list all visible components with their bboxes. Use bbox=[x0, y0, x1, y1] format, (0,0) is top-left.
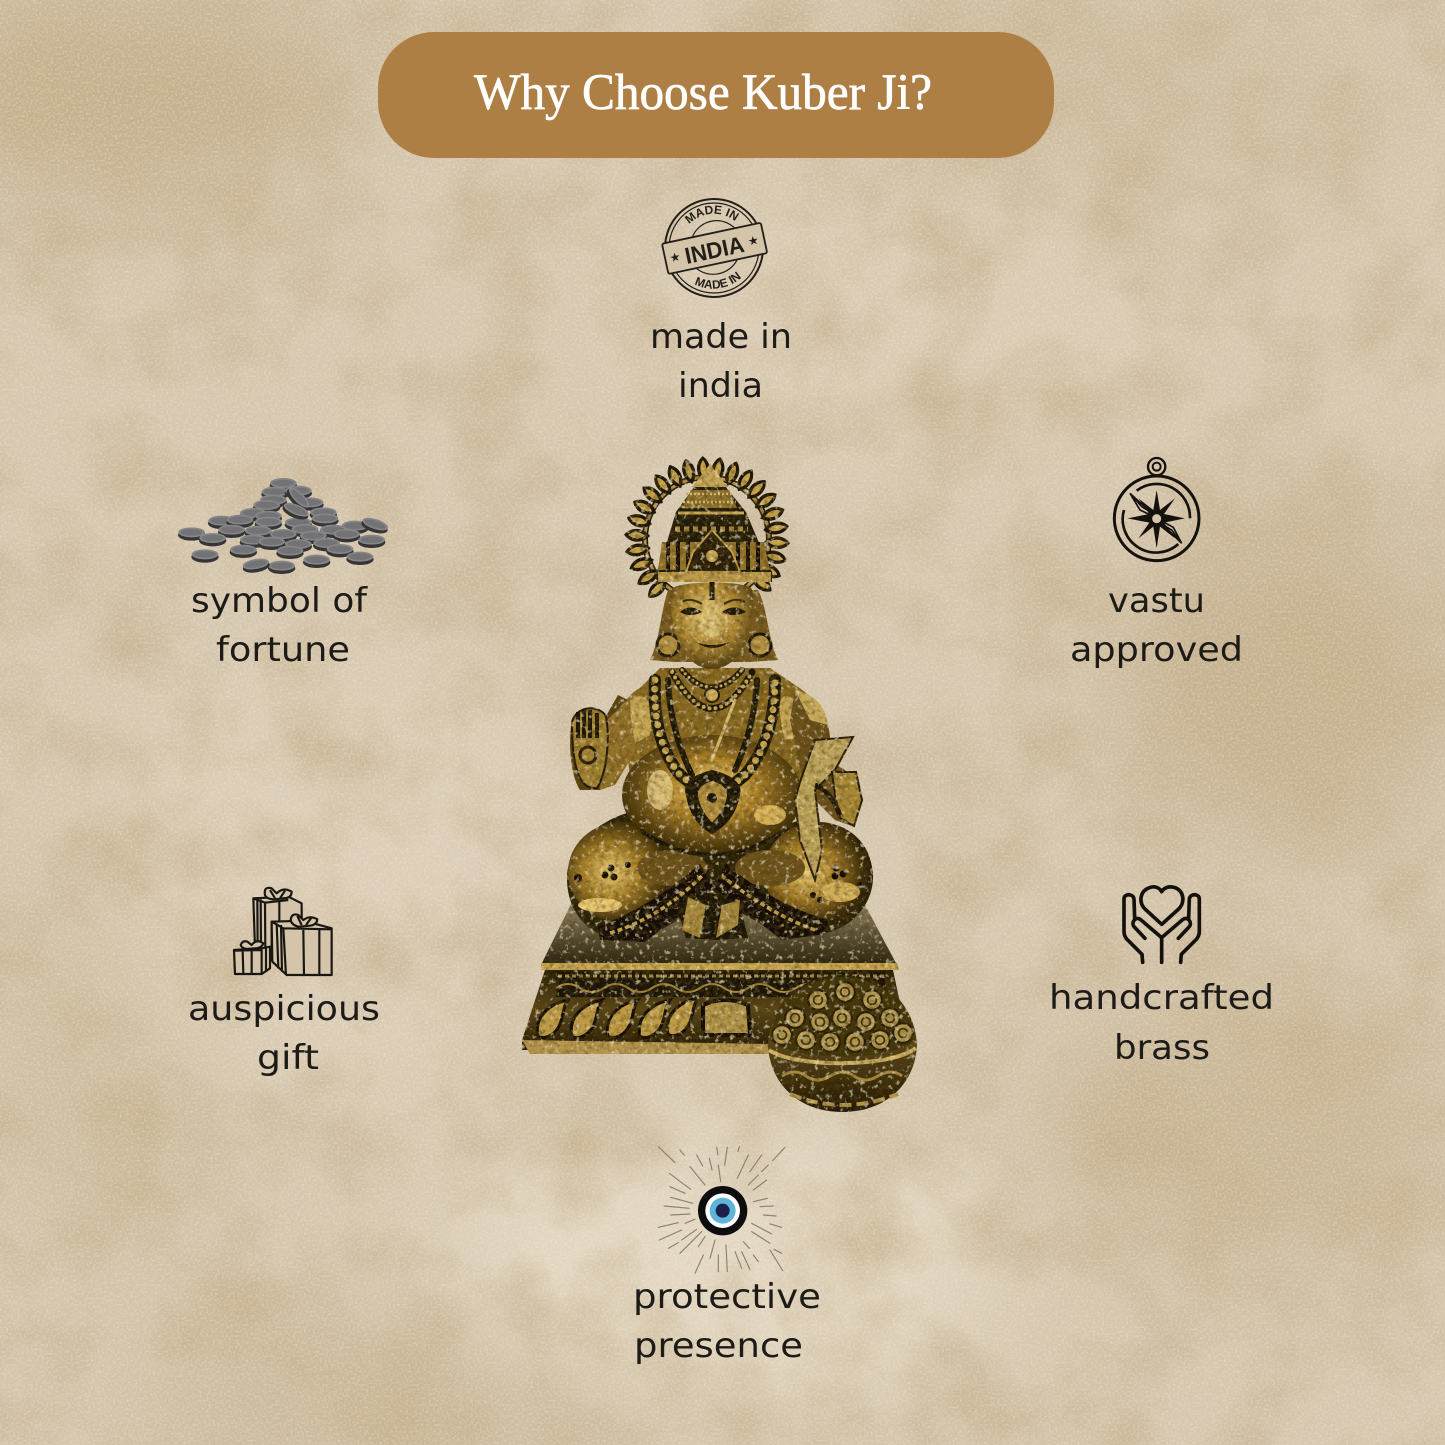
icon: made in india stamp bbox=[661, 198, 768, 298]
icon: made in india stamp: MADE IN bbox=[684, 205, 740, 224]
statue: coin pot bbox=[768, 975, 917, 1112]
label: symbol of fortune: fortune bbox=[216, 630, 350, 670]
statue: crown bbox=[656, 464, 772, 582]
label: auspicious gift: auspicious bbox=[188, 989, 380, 1029]
label: made in india bbox=[650, 317, 792, 406]
icon: made in india stamp: INDIA bbox=[682, 231, 746, 269]
icon: made in india stamp: ★ bbox=[747, 233, 760, 249]
label: vastu approved: approved bbox=[1070, 630, 1243, 670]
label: protective presence bbox=[633, 1277, 821, 1366]
statue: necklaces bbox=[655, 670, 775, 834]
label: handcrafted brass: brass bbox=[1114, 1028, 1210, 1068]
icon: hands holding heart bbox=[1124, 887, 1199, 962]
label: made in india: india bbox=[678, 366, 763, 406]
icon: made in india stamp: MADE IN bbox=[694, 272, 741, 289]
brass Kuber statue bbox=[522, 456, 917, 1112]
statue: halo bbox=[624, 456, 790, 602]
icon: evil eye with rays bbox=[658, 1147, 785, 1273]
feature: protective presence bbox=[633, 1147, 821, 1366]
icon: gift boxes bbox=[234, 888, 332, 975]
label: vastu approved: vastu bbox=[1108, 581, 1205, 621]
label: vastu approved bbox=[1070, 581, 1243, 670]
icon: made in india stamp: ★ bbox=[668, 249, 682, 265]
feature: symbol of fortune bbox=[178, 478, 390, 670]
label: handcrafted brass bbox=[1049, 978, 1274, 1068]
statue: raising hand arm bbox=[570, 695, 636, 790]
label: protective presence: protective bbox=[633, 1277, 821, 1317]
statue: stepped base bbox=[522, 892, 916, 1054]
title banner bbox=[378, 32, 1054, 158]
label: made in india: made in bbox=[650, 317, 792, 357]
icon: compass bbox=[1114, 458, 1199, 561]
statue: head and face bbox=[650, 576, 778, 669]
label: auspicious gift bbox=[188, 989, 380, 1078]
statue: legs bbox=[567, 812, 873, 942]
label: protective presence: presence bbox=[634, 1326, 803, 1366]
feature: vastu approved bbox=[1070, 458, 1243, 670]
feature: auspicious gift bbox=[188, 888, 380, 1078]
label: symbol of fortune: symbol of bbox=[191, 581, 368, 621]
feature: handcrafted brass bbox=[1049, 887, 1274, 1068]
statue: torso and belly bbox=[619, 668, 820, 855]
statue: right arm with manuscript bbox=[790, 690, 862, 880]
label: symbol of fortune bbox=[191, 581, 368, 670]
feature: made in india bbox=[650, 198, 792, 406]
label: auspicious gift: gift bbox=[257, 1038, 319, 1078]
icon: pile of coins bbox=[178, 478, 390, 575]
title banner: Why Choose Kuber Ji? bbox=[474, 65, 932, 121]
label: handcrafted brass: handcrafted bbox=[1049, 978, 1274, 1018]
